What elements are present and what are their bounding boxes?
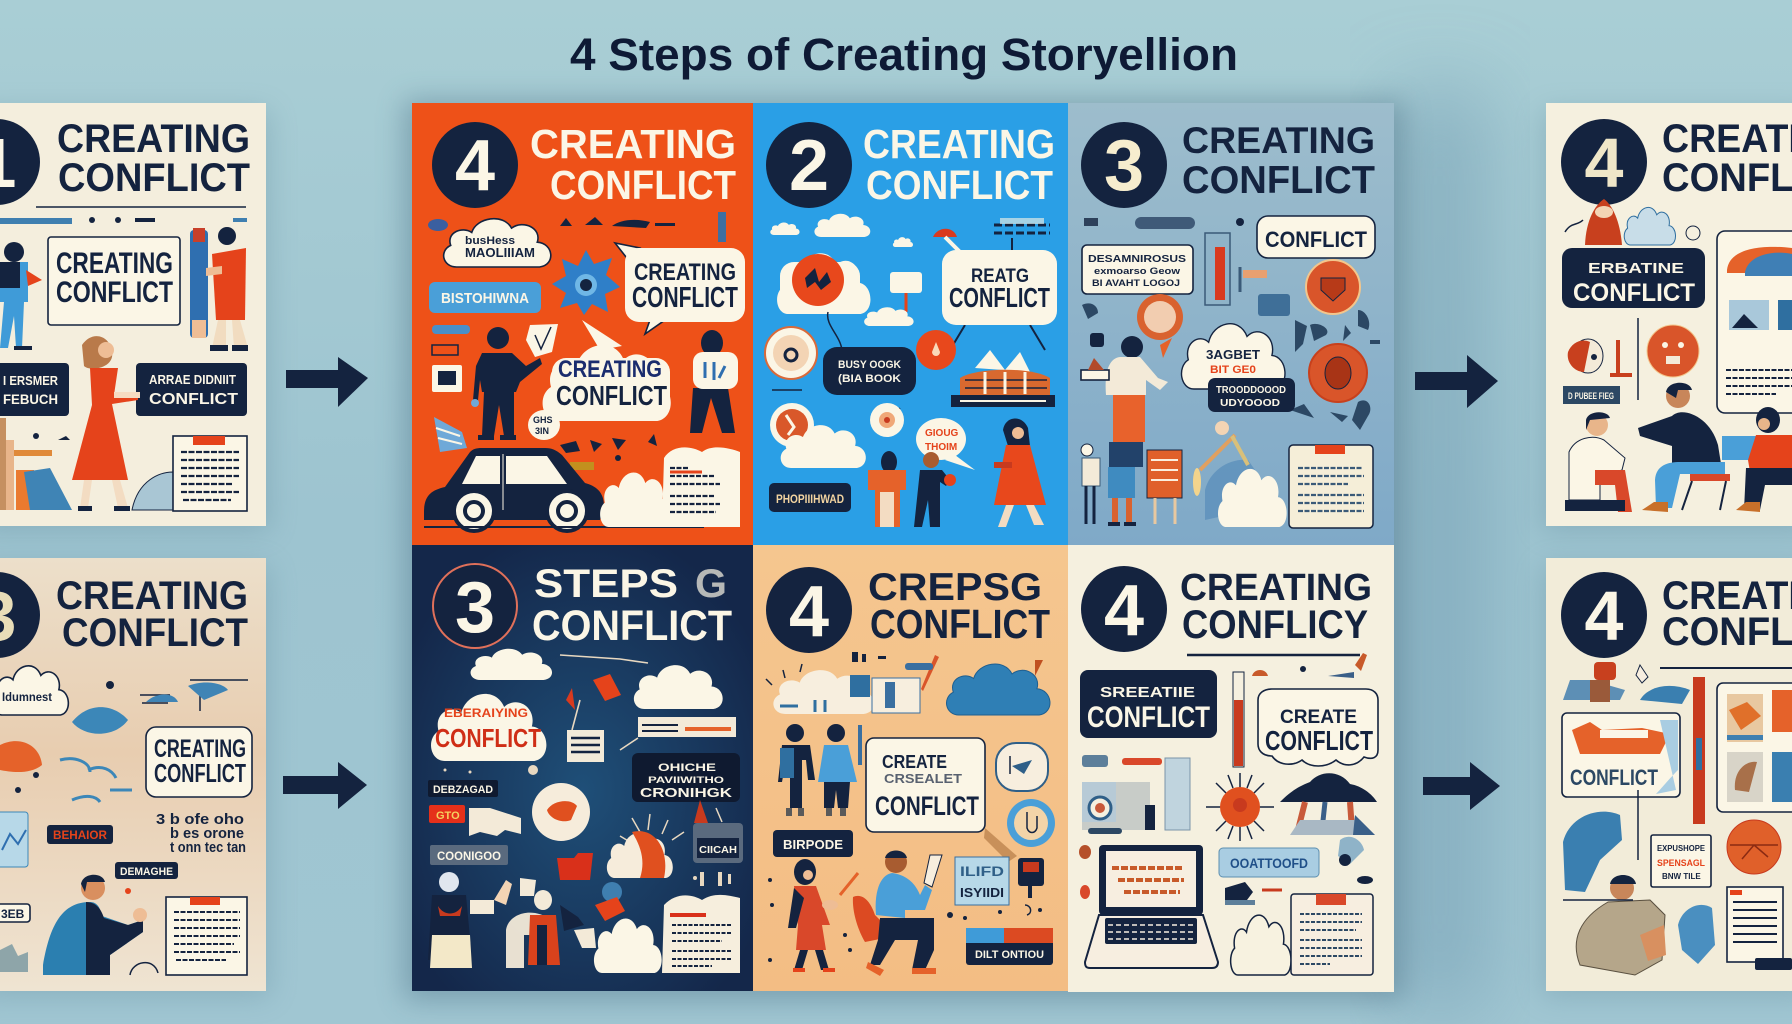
small oval bubble: 3IN: [535, 426, 549, 436]
cloud: [594, 918, 662, 973]
figure: seated man: [1638, 383, 1730, 512]
step badge 4: [766, 567, 852, 653]
figure: left person: [471, 327, 542, 440]
navy bar: [1755, 958, 1792, 970]
cloud with text: 3AGBET: [1206, 347, 1260, 362]
figure: crouching person: [1563, 875, 1666, 975]
red folder: [557, 853, 593, 880]
small oval bubble: GHS: [533, 415, 553, 425]
figure and cloud: [1565, 199, 1700, 245]
figure: seated doctor: [1565, 412, 1632, 512]
speech oval: GIOUG: [925, 428, 959, 439]
heading: CREATING: [530, 121, 736, 167]
speech circle: [1137, 294, 1183, 358]
document: [1727, 887, 1783, 962]
arrow: right top: [1415, 355, 1498, 408]
icon: blue oval: [72, 707, 128, 734]
figure: woman: [788, 859, 858, 972]
heading: [868, 566, 1050, 647]
cloud bubble: CONFLICT: [435, 723, 541, 753]
step badge 3: [0, 572, 40, 658]
heading: G: [695, 562, 727, 606]
note text: b es orone: [170, 825, 244, 842]
document: [166, 897, 247, 975]
callout: creating conflict: CONFLICT: [154, 758, 246, 788]
figure: navy person: [914, 452, 956, 527]
text box: exmoarso Geow: [1094, 266, 1181, 276]
icons: doodles top: [106, 680, 248, 711]
blue pill: [429, 282, 541, 313]
speech bubble: CREATING: [634, 259, 736, 286]
blue pill: [1219, 848, 1319, 877]
figure: man in orange: [868, 451, 906, 527]
step badge 3: 3: [1104, 126, 1144, 206]
figures: group: [428, 872, 625, 968]
blue blob: [1678, 905, 1715, 964]
icon: sun: [1206, 773, 1274, 841]
navy label red: [47, 825, 113, 844]
doodles top: [1084, 217, 1244, 229]
cloud with orange: [607, 831, 673, 878]
blue pill: BISTOHIWNA: [441, 290, 529, 307]
heading: [1182, 120, 1375, 202]
navy label: TROODDOOOD: [1216, 385, 1286, 396]
callout pill: [1257, 216, 1375, 258]
figure: small striped: [1081, 444, 1100, 524]
cloud with text: BIT GE0: [1210, 364, 1256, 376]
step badge 4: [1561, 119, 1647, 205]
navy label: DEMAGHE: [120, 866, 173, 878]
navy label right: CONFLICT: [149, 391, 238, 408]
striped panel: [638, 717, 736, 737]
small card icon: [864, 272, 922, 326]
red column: [1693, 677, 1705, 824]
navy label: [1208, 378, 1295, 412]
blue circle: [1007, 799, 1055, 847]
icons: orange blob and marks: [0, 741, 132, 802]
badge: [1309, 344, 1367, 402]
card: ILIFD: [960, 863, 1004, 879]
cloud: [600, 472, 672, 527]
figure: seated man: [853, 850, 942, 976]
step badge 3: 3: [455, 568, 495, 648]
figure: blue tent and bat: [1193, 421, 1262, 520]
title: 4 Steps of Creating Storyellion: [570, 29, 1238, 80]
panel: blue poster: [753, 103, 1068, 545]
divider: [1637, 790, 1639, 860]
heading: [863, 121, 1055, 208]
navy label: [1563, 386, 1620, 404]
speech cloud: [543, 320, 671, 421]
navy pill: BIRPODE: [783, 837, 843, 852]
heading: [1180, 567, 1372, 647]
doodles top: [852, 652, 1043, 691]
divider doodles: [1187, 653, 1367, 678]
text box: DESAMNIROSUS: [1088, 254, 1186, 265]
heading: STEPS: [534, 562, 678, 606]
document: [1289, 445, 1373, 528]
callout box: CREATE: [882, 752, 947, 772]
circle with orange mark: [532, 783, 590, 841]
card: BNW TILE: [1662, 872, 1701, 881]
panel: cream poster: [1068, 545, 1394, 992]
callout box: CONFLICT: [56, 276, 173, 309]
navy pill: PHOPIIIHWAD: [776, 492, 844, 506]
icon: mask face: [1568, 339, 1632, 375]
illustration: car: [424, 448, 704, 531]
card: SPENSAGL: [1657, 858, 1705, 868]
dark pill: [428, 780, 498, 797]
illustration: mound: [132, 472, 173, 510]
navy callout: [1562, 248, 1705, 308]
cloud with device: [766, 664, 920, 714]
marks: [768, 878, 1042, 962]
card: ISYIIDI: [960, 885, 1004, 900]
figures: two people: [778, 724, 862, 816]
icon: device: [1018, 858, 1044, 898]
line doodles: [772, 312, 902, 426]
striped box: [567, 730, 604, 762]
figure: blue cloth: [1563, 812, 1622, 892]
heading: [57, 117, 250, 200]
bubble: [1258, 689, 1378, 766]
bubble: CONFLICT: [1265, 725, 1373, 756]
marks: [1079, 845, 1282, 905]
clouds: [471, 649, 723, 709]
panel: right bottom, step 4: [1546, 558, 1792, 991]
machine icon: CIICAH: [699, 845, 737, 856]
badge: [1647, 325, 1699, 377]
heading: CREATING: [57, 117, 250, 161]
note text: 3 b ofe oho: [156, 811, 244, 828]
doodles top: [428, 212, 726, 242]
arrow: right bottom: [1423, 762, 1500, 810]
navy label left: I ERSMER: [3, 373, 59, 388]
split pill: DILT ONTIOU: [975, 949, 1044, 961]
outlined image panel: [1717, 683, 1792, 812]
illustration: building: [951, 350, 1055, 407]
icon: red column: [1205, 233, 1230, 305]
split pill: [966, 928, 1053, 965]
burst lines: [620, 808, 722, 842]
step badge 3: [433, 564, 517, 648]
step badge 2: 2: [789, 126, 829, 206]
cloud: [781, 425, 866, 468]
arrow: left bottom: [283, 762, 367, 809]
grey pill: [430, 845, 508, 865]
navy label: BUSY OOGK: [838, 359, 901, 371]
cloud: [1231, 915, 1291, 975]
navy label: [823, 347, 916, 395]
icon: laptop: [1085, 845, 1218, 968]
icon: small circle: [870, 403, 904, 437]
outlined pill: 3EB: [1, 907, 25, 921]
heading: CONFLICT: [866, 162, 1053, 208]
dark text label: CRONIHGK: [640, 785, 733, 800]
step badge 4: 4: [1104, 571, 1144, 651]
doodles below bubble: [560, 434, 657, 470]
navy callout: SREEATIIE: [1100, 684, 1195, 701]
navy label: D PUBEE FIEG: [1568, 391, 1614, 401]
heading: [1662, 574, 1792, 654]
doodle marks: [444, 765, 731, 886]
cloud: [1218, 469, 1287, 527]
heading: CREATING: [56, 574, 248, 618]
bubble: CREATE: [1280, 707, 1357, 728]
note text: t onn tec tan: [170, 839, 246, 856]
step badge 1: [0, 119, 40, 205]
heading: CONFLICY: [1182, 603, 1368, 647]
figure: man in blue: [43, 875, 147, 975]
callout: creating conflict: [146, 727, 252, 797]
illustration: office devices: [1082, 755, 1190, 834]
callout box: [866, 738, 985, 832]
small oval bubble: [528, 410, 560, 440]
dark text label: OHICHE: [658, 762, 716, 774]
machine icon: [693, 800, 743, 863]
red label with white shape: GTO: [436, 810, 460, 822]
heading: CONFLICT: [1182, 159, 1375, 202]
speech bubble: [942, 250, 1057, 350]
card: [1651, 835, 1711, 887]
heading: CONFLICT: [532, 602, 732, 650]
navy pill: [773, 830, 853, 857]
grey pill: COONIGOO: [437, 849, 501, 863]
icon: orange blob: [593, 674, 621, 701]
dark pill: DEBZAGAD: [433, 784, 493, 796]
figure: woman in red: [994, 418, 1046, 527]
card: [955, 857, 1009, 905]
callout box: CRSEALET: [884, 771, 962, 786]
heading: [1662, 117, 1792, 200]
heading: [532, 562, 732, 650]
step badge 4: [432, 122, 518, 208]
step badge 3: [1081, 122, 1167, 208]
speech bubble: REATG: [971, 266, 1029, 287]
speech bubble: CONFLICT: [632, 282, 738, 314]
callout box: CONFLICT: [875, 791, 979, 821]
heading: [530, 121, 736, 208]
navy label left: FEBUCH: [3, 391, 58, 407]
figure: man with notes: [0, 242, 42, 350]
divider line: [1660, 667, 1792, 669]
navy callout: [1080, 670, 1217, 738]
icon: bird figure: [1338, 837, 1373, 884]
callout box: CREATING: [56, 247, 173, 280]
doodles top: [1563, 662, 1690, 704]
navy label red: BEHAIOR: [53, 828, 107, 842]
image callout: CONFLICT: [1570, 765, 1658, 790]
blue backdrop: [1722, 436, 1780, 460]
doodles top right: [933, 218, 1050, 253]
small badge label: [1081, 358, 1109, 380]
heading: CREATING: [863, 121, 1055, 167]
small icons column: [432, 325, 470, 452]
card: blue chart: [0, 812, 28, 867]
cloud note: busHess: [465, 235, 515, 247]
navy label left: [0, 363, 69, 416]
panel: left bottom, step 3: [0, 558, 266, 991]
icon: striped fan: [984, 828, 1017, 862]
icon: small flag card: [1240, 267, 1290, 316]
document: [662, 447, 740, 527]
heading: CREATING: [1182, 120, 1375, 161]
divider line: [1637, 318, 1639, 400]
document: [1291, 894, 1373, 975]
illustration: desk and mountain: [0, 418, 72, 510]
speech cloud: CONFLICT: [556, 380, 667, 411]
cloud note: [0, 666, 68, 715]
arrow: left top: [286, 357, 368, 407]
icon: check balloon: [526, 324, 558, 357]
heading: [56, 574, 248, 655]
navy label: UDYOOOD: [1220, 398, 1280, 409]
outlined panel: [1717, 231, 1792, 413]
badge: [1306, 260, 1360, 314]
heading: CONFLICT: [62, 611, 248, 655]
cloud with red circle: [777, 253, 870, 314]
panel: left top, step 1: [0, 103, 266, 526]
heading: CREPSG: [868, 566, 1042, 609]
dark doodles: [1082, 303, 1380, 430]
badge: [1727, 820, 1781, 874]
step badge 2: [766, 122, 852, 208]
clouds top: [770, 214, 913, 247]
card: EXPUSHOPE: [1657, 844, 1706, 853]
red label with white shape: [429, 805, 521, 836]
icon: blue burst: [552, 250, 620, 315]
step badge 4: 4: [1585, 577, 1624, 655]
text box: [1082, 245, 1193, 294]
callout: creating conflict: CREATING: [154, 735, 246, 763]
icon: orange circle: [770, 403, 814, 447]
outlined pill: [0, 904, 30, 922]
doodles: [560, 655, 648, 750]
cloud bubble: [431, 694, 546, 761]
blue pill: OOATTOOFD: [1230, 855, 1308, 871]
speech cloud: CREATING: [558, 356, 662, 383]
heading: CREATING: [1180, 567, 1372, 609]
badge: [996, 743, 1048, 791]
illustration: dark umbrella and towers: [1280, 773, 1377, 835]
figures: pair talking: [190, 227, 248, 351]
navy label: (BIA BOOK: [838, 373, 901, 385]
navy label right: [136, 363, 247, 416]
panel: navy poster: [412, 545, 753, 991]
panel: grey-blue poster: [1068, 103, 1394, 545]
speech bubble: [615, 243, 745, 334]
navy pill: [769, 483, 851, 512]
red column: [1233, 672, 1244, 767]
document: [173, 436, 247, 511]
panel: peach poster: [753, 545, 1068, 991]
dark text label: [632, 753, 740, 802]
navy label right: ARRAE DIDNIIT: [149, 372, 236, 387]
speech oval: THOIM: [925, 442, 957, 453]
step badge 4: 4: [789, 572, 829, 652]
step badge 4: 4: [1585, 124, 1624, 202]
cloud note: [444, 219, 551, 267]
icon: red circle: [916, 330, 956, 370]
figure: woman in red dress: [72, 336, 140, 511]
cloud with text: [1181, 324, 1285, 389]
figure: woman seated: [1736, 407, 1792, 512]
cloud bubble: EBERAIYING: [444, 706, 528, 720]
panel: right top, step 4: [1546, 103, 1792, 526]
navy callout: ERBATINE: [1588, 260, 1684, 277]
cloud note: Idumnest: [2, 690, 52, 704]
navy callout: CONFLICT: [1573, 279, 1695, 307]
icon: ring circle: [765, 327, 817, 379]
divider doodles: [0, 207, 247, 224]
heading: CONFLICT: [58, 156, 250, 200]
document: [662, 895, 740, 973]
blue cloud: [946, 664, 1050, 715]
heading: CONFLICT: [550, 162, 736, 208]
panel: orange poster: [412, 103, 753, 545]
navy label: [115, 862, 178, 879]
callout pill: CONFLICT: [1265, 227, 1368, 252]
step badge 4: [1081, 566, 1167, 652]
figure: right person: [690, 330, 738, 433]
image callout: [1562, 713, 1680, 797]
heading: CONFLICT: [870, 601, 1050, 647]
speech oval: [916, 418, 975, 470]
callout box: [48, 237, 180, 325]
text box: BI AVAHT LOGOJ: [1092, 278, 1180, 288]
step badge 4: [1561, 572, 1647, 658]
figure: person in orange trousers: [1106, 336, 1168, 526]
dark text label: PAVIIWITHO: [648, 775, 724, 785]
sign board: [1147, 450, 1182, 524]
navy callout: CONFLICT: [1087, 701, 1210, 734]
doodle bottom: [0, 944, 158, 975]
note text: [156, 811, 246, 856]
step badge 4: 4: [455, 126, 495, 206]
cloud note: MAOLIIIAM: [465, 245, 535, 260]
speech bubble: CONFLICT: [949, 282, 1050, 313]
